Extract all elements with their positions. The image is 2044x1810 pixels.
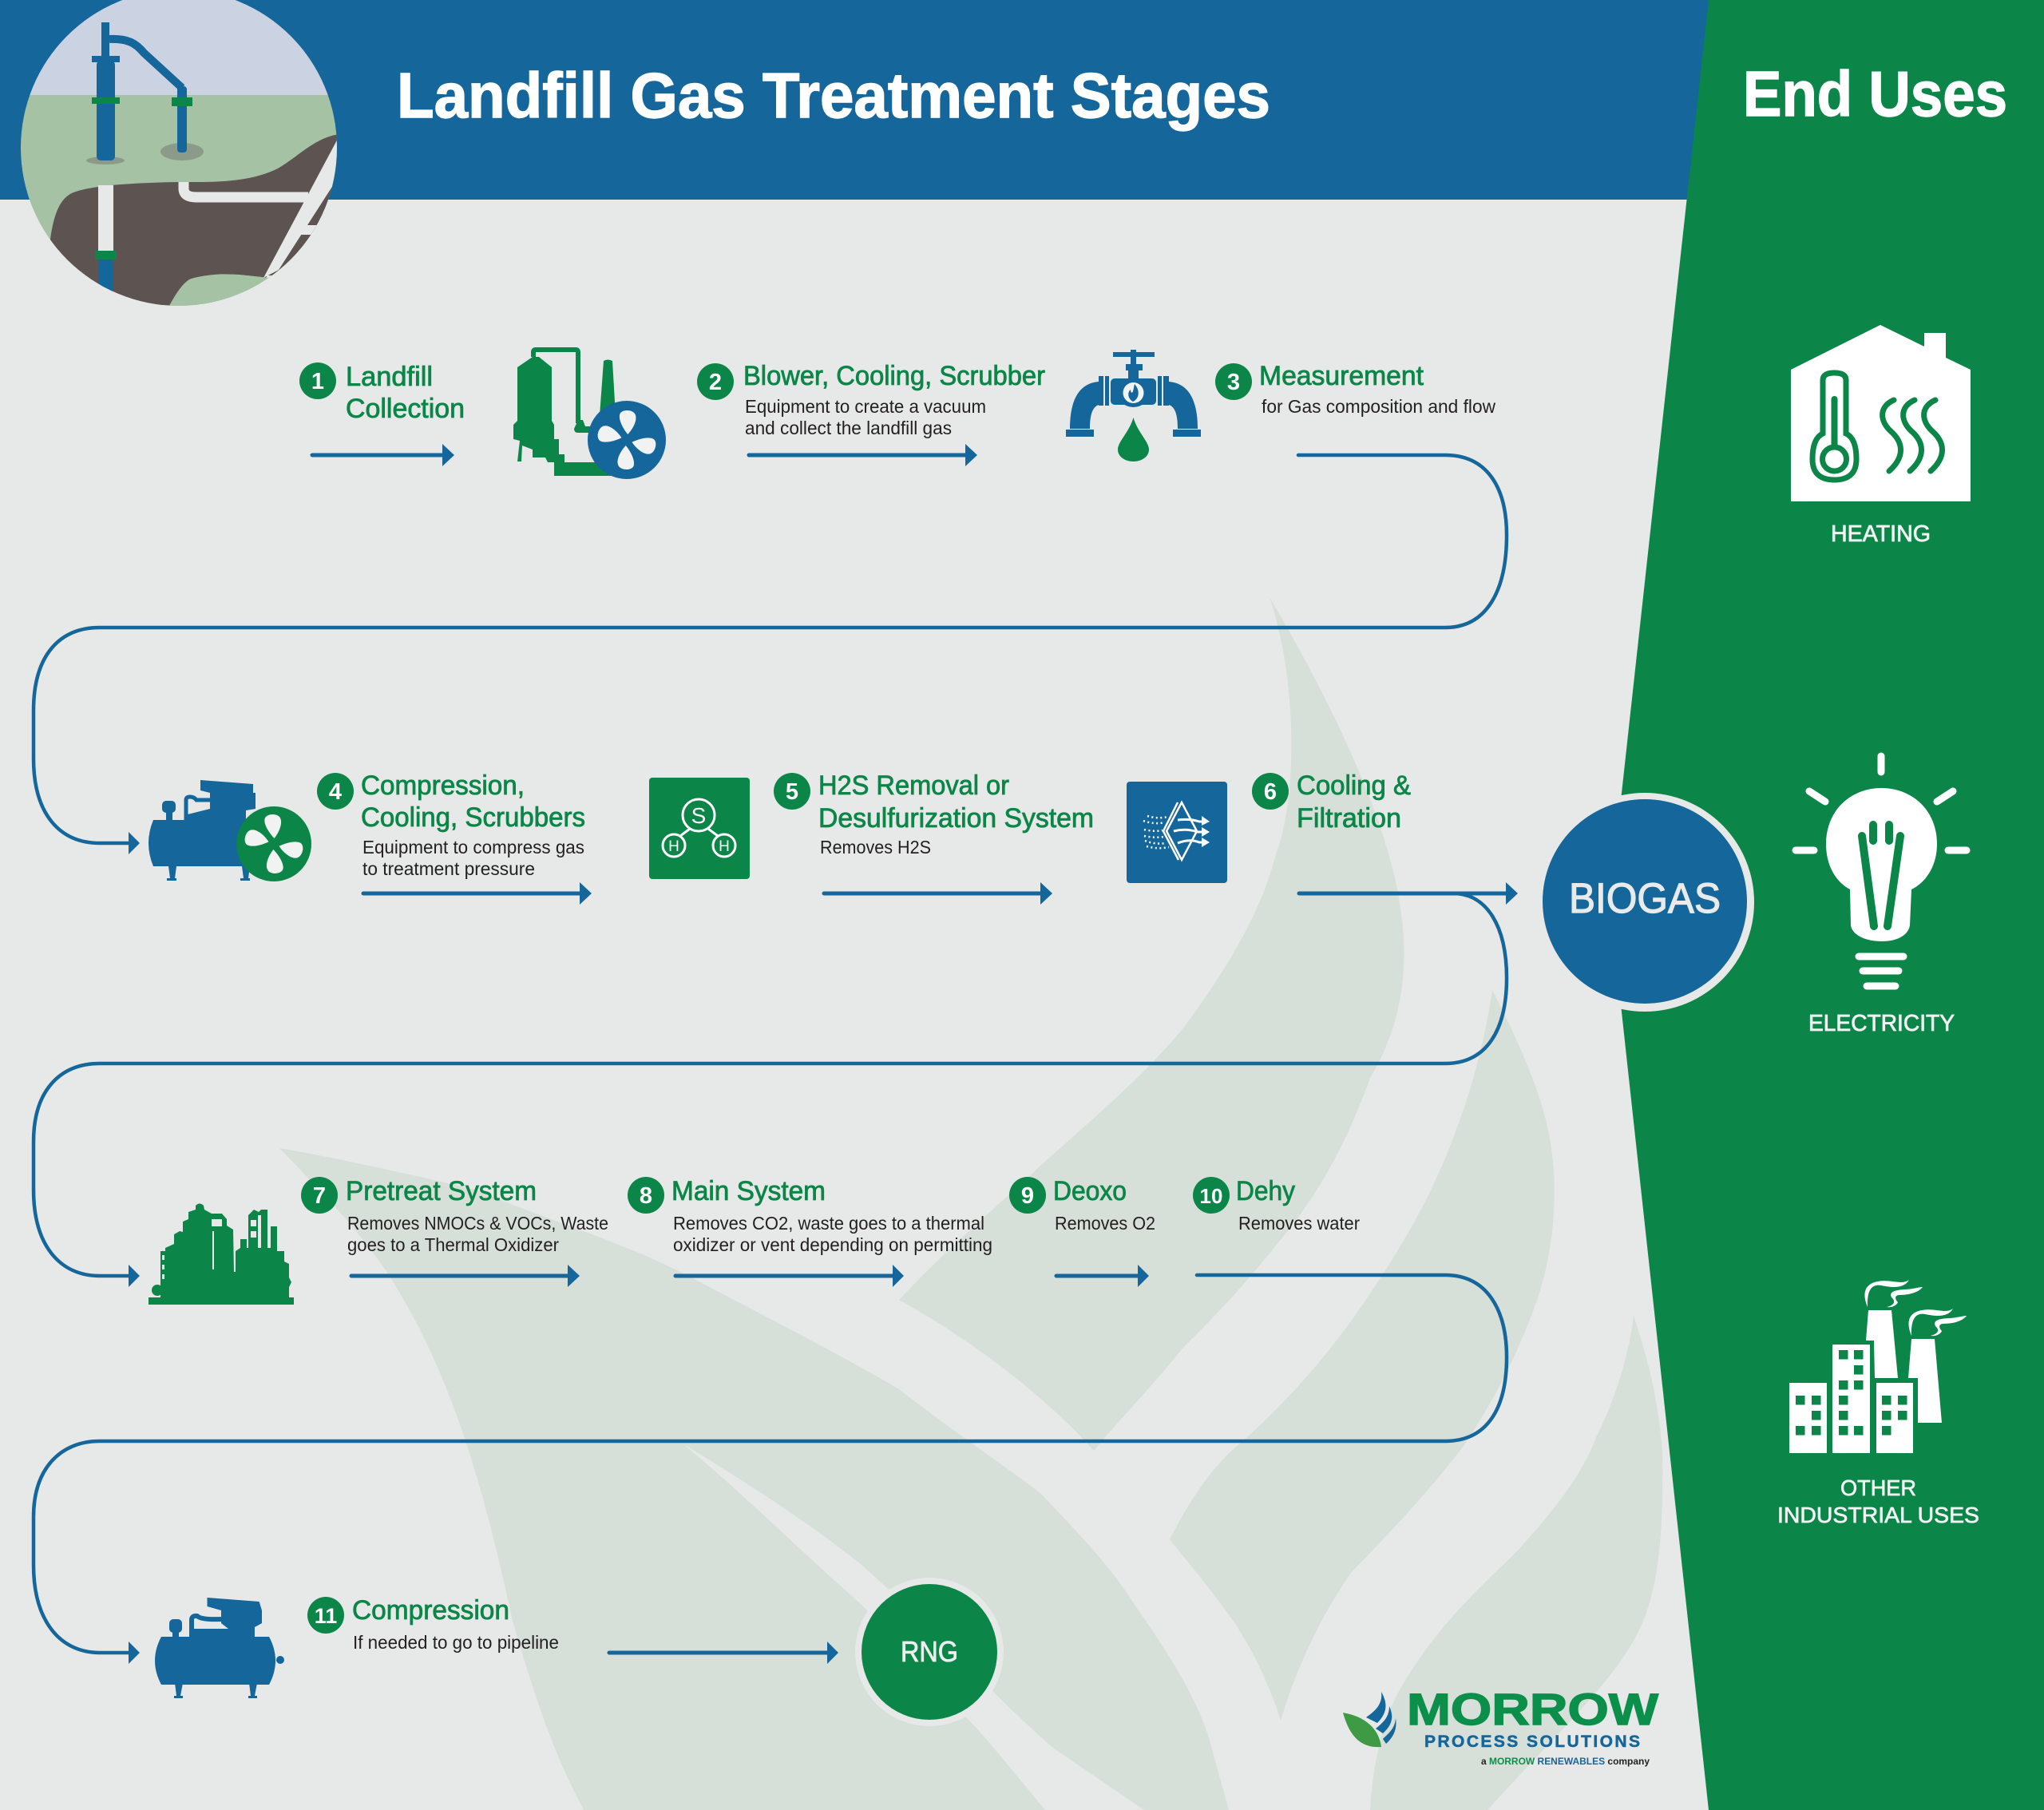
arrow: step 1 bbox=[312, 444, 454, 466]
illustration: landfill gas wells bbox=[21, 0, 337, 306]
label: other industrial uses bbox=[1777, 1475, 1979, 1527]
icon: compressor bbox=[155, 1598, 284, 1698]
step 7: pretreat system: Removes NMOCs & VOCs, Waste bbox=[347, 1213, 608, 1234]
step 8: main system: 8 bbox=[640, 1183, 652, 1209]
icon: heating house bbox=[1791, 325, 1971, 501]
step 3: measurement: for Gas composition and flow bbox=[1262, 396, 1495, 417]
arrow: to RNG bbox=[609, 1642, 838, 1664]
step 5: H2S removal bbox=[774, 770, 1094, 857]
step 10: dehy: Removes water bbox=[1238, 1213, 1360, 1234]
step 9: deoxo: 9 bbox=[1021, 1183, 1034, 1209]
step 7: pretreat system: Pretreat System bbox=[346, 1176, 537, 1206]
step 6: cooling and filtration: Cooling & bbox=[1297, 770, 1411, 801]
step 1: landfill collection: Landfill bbox=[346, 362, 433, 392]
step 1: landfill collection: 1 bbox=[311, 369, 324, 394]
icon: H2S molecule: H bbox=[719, 838, 730, 855]
step 11: compression: 11 bbox=[315, 1604, 337, 1628]
step 1: landfill collection: Collection bbox=[346, 394, 465, 424]
step 5: H2S removal: 5 bbox=[786, 779, 798, 805]
step 9: deoxo bbox=[1009, 1176, 1155, 1234]
step 2: blower, cooling, scrubber: Blower, Cooling, Scrubber bbox=[743, 361, 1045, 391]
label: electricity: ELECTRICITY bbox=[1808, 1011, 1955, 1036]
arrow: step 8 bbox=[675, 1265, 904, 1287]
biogas node: BIOGAS bbox=[1569, 875, 1721, 922]
step 8: main system: Main System bbox=[671, 1176, 826, 1206]
step 9: deoxo: Deoxo bbox=[1053, 1176, 1127, 1206]
RNG node bbox=[855, 1578, 1004, 1726]
step 8: main system: oxidizer or vent depending on permitting bbox=[673, 1234, 992, 1255]
arrow: step 5 bbox=[824, 882, 1052, 905]
watermark leaves bbox=[279, 597, 1662, 1810]
step 4: compression, cooling, scrubbers: Cooling, Scrubbers bbox=[361, 802, 585, 833]
label: heating: HEATING bbox=[1831, 521, 1931, 547]
step 2: blower, cooling, scrubber bbox=[697, 361, 1045, 438]
arrow: step 9 bbox=[1056, 1265, 1149, 1287]
logo: Morrow Process Solutions: MORROW bbox=[1407, 1684, 1658, 1734]
step 5: H2S removal: Desulfurization System bbox=[818, 803, 1094, 834]
step 10: dehy bbox=[1193, 1176, 1360, 1234]
icon: blower equipment bbox=[513, 350, 666, 479]
step 7: pretreat system: goes to a Thermal Oxidizer bbox=[347, 1234, 559, 1255]
step 4: compression, cooling, scrubbers: Compression, bbox=[361, 770, 525, 801]
flow line: row 2 to row 3 bbox=[34, 893, 1507, 1287]
step 2: blower, cooling, scrubber: and collect the landfill gas bbox=[745, 418, 952, 438]
step 3: measurement: 3 bbox=[1227, 370, 1240, 395]
biogas node bbox=[1535, 793, 1754, 1012]
label: other industrial uses: INDUSTRIAL USES bbox=[1777, 1503, 1979, 1527]
step 8: main system bbox=[628, 1176, 992, 1255]
step 3: measurement bbox=[1215, 361, 1495, 417]
arrow: step 2 bbox=[749, 444, 977, 466]
icon: industrial buildings bbox=[1789, 1280, 1967, 1453]
step 2: blower, cooling, scrubber: 2 bbox=[709, 370, 722, 395]
step 6: cooling and filtration: Filtration bbox=[1297, 803, 1401, 834]
logo: Morrow Process Solutions: a MORROW RENEWABLES company bbox=[1481, 1756, 1650, 1767]
step 6: cooling and filtration: 6 bbox=[1264, 779, 1277, 805]
step 1: landfill collection bbox=[299, 362, 465, 424]
label: other industrial uses: OTHER bbox=[1840, 1475, 1916, 1500]
icon: valve with drop bbox=[1066, 350, 1201, 461]
flow line: row 3 to row 4 bbox=[34, 1275, 1507, 1664]
step 3: measurement: Measurement bbox=[1259, 361, 1424, 391]
icon: H2S molecule: H bbox=[668, 838, 679, 855]
step 10: dehy: Dehy bbox=[1236, 1176, 1295, 1206]
arrow: to biogas bbox=[1299, 882, 1518, 905]
step 7: pretreat system: 7 bbox=[313, 1183, 326, 1209]
step 6: cooling and filtration bbox=[1252, 770, 1411, 834]
RNG node: RNG bbox=[901, 1635, 958, 1668]
step 11: compression: If needed to go to pipeline bbox=[353, 1632, 559, 1653]
icon: compressor with fan bbox=[149, 780, 311, 881]
step 11: compression: Compression bbox=[352, 1595, 509, 1626]
step 2: blower, cooling, scrubber: Equipment to create a vacuum bbox=[745, 396, 986, 417]
heading: end uses: End Uses bbox=[1743, 58, 2007, 129]
watermark light wedge bbox=[683, 1444, 1144, 1810]
arrow: step 7 bbox=[351, 1265, 580, 1287]
step 8: main system: Removes CO2, waste goes to a thermal bbox=[673, 1213, 984, 1234]
step 7: pretreat system bbox=[301, 1176, 608, 1255]
step 4: compression, cooling, scrubbers: 4 bbox=[329, 779, 342, 805]
icon: filter bbox=[1127, 782, 1227, 883]
icon: H2S molecule: S bbox=[691, 803, 706, 828]
flow line: row 1 to row 2 bbox=[34, 455, 1507, 854]
icon: refinery bbox=[149, 1204, 294, 1305]
step 5: H2S removal: Removes H2S bbox=[820, 837, 931, 857]
icon: electricity bulb bbox=[1796, 756, 1967, 986]
step 11: compression bbox=[307, 1595, 559, 1653]
step 4: compression, cooling, scrubbers: Equipment to compress gas bbox=[362, 837, 584, 857]
title: Landfill Gas Treatment Stages bbox=[397, 60, 1270, 131]
icon: H2S molecule bbox=[649, 778, 750, 879]
logo: Morrow Process Solutions bbox=[1343, 1684, 1658, 1767]
step 4: compression, cooling, scrubbers: to treatment pressure bbox=[362, 858, 535, 879]
step 4: compression, cooling, scrubbers bbox=[317, 770, 585, 879]
step 9: deoxo: Removes O2 bbox=[1055, 1213, 1155, 1234]
header banner bbox=[0, 0, 1757, 200]
end uses panel bbox=[1610, 0, 2044, 1810]
step 10: dehy: 10 bbox=[1200, 1184, 1222, 1208]
arrow: step 4 bbox=[363, 882, 592, 905]
logo: Morrow Process Solutions: PROCESS SOLUTIONS bbox=[1424, 1733, 1640, 1751]
step 5: H2S removal: H2S Removal or bbox=[818, 770, 1009, 801]
